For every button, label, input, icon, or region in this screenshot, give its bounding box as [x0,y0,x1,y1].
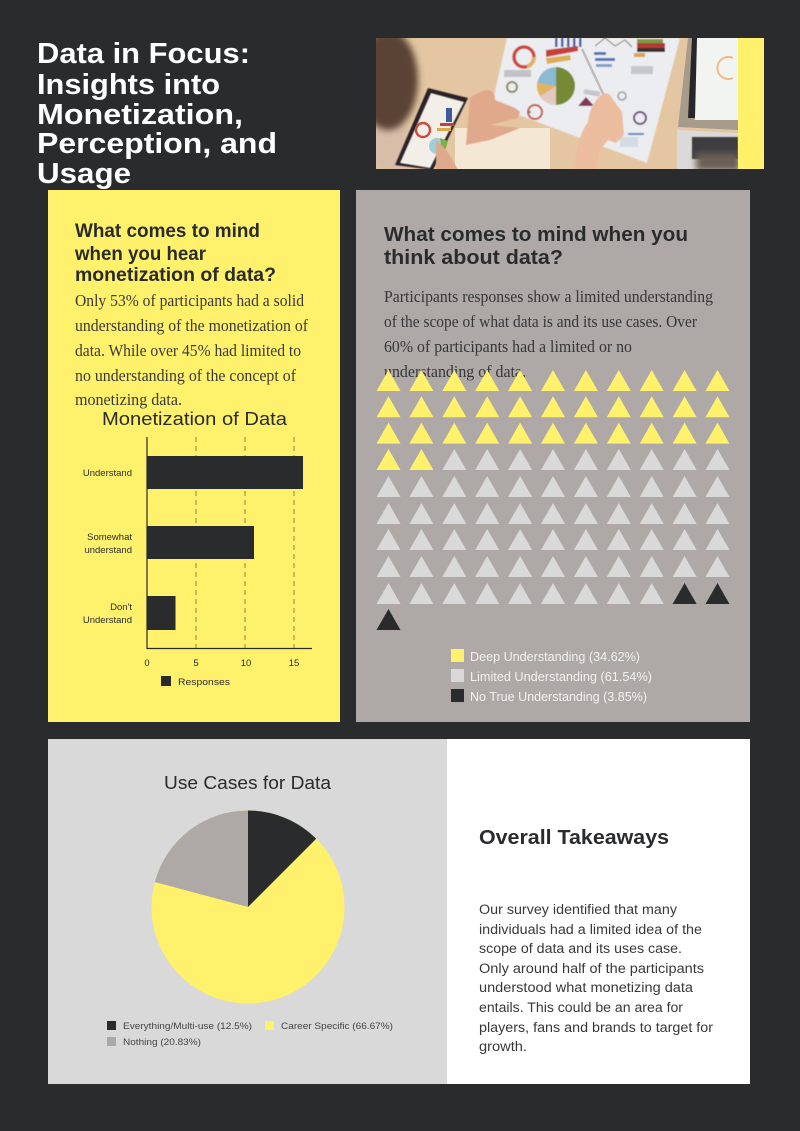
sleeve and arm [376,128,408,169]
bar chart: monetization of data: Somewhat [87,532,132,543]
text: monetization body: Only 53% of participants had a solid [75,291,305,310]
bar chart: monetization of data: Monetization of Data [102,409,288,429]
text: monetization body: data. While over 45% had limited to [75,341,301,360]
title: Usage [37,158,131,190]
bar chart: monetization of data: 10 [241,658,251,669]
heading: takeaways: Overall Takeaways [479,826,669,849]
bar chart: monetization of data: Understand [83,615,132,626]
chart title: Use Cases for Data [164,773,332,793]
accent bar [738,38,764,169]
legend: understanding levels [451,649,652,704]
legend: understanding levels: Limited Understanding (61.54%) [470,670,652,684]
text: perception body: Participants responses show a limited understanding [384,287,713,306]
heading: monetization: What comes to mind [75,220,260,242]
smartphone [395,88,468,170]
text: takeaways body: players, fans and brands to target for [479,1020,714,1035]
text: perception body: understanding of data. [384,362,526,381]
bar chart: monetization of data: Responses [178,677,230,688]
title: Insights into [37,69,220,101]
text: takeaways body: individuals had a limited idea of the [479,922,702,937]
legend: understanding levels: Deep Understanding (34.62%) [470,650,640,664]
heading: monetization: monetization of data? [75,264,276,286]
text: perception body [384,287,713,381]
laptop [678,38,738,130]
bar chart: monetization of data: 0 [144,658,150,669]
pictogram: triangles [376,370,730,630]
report sheet [492,38,680,163]
text: takeaways body: Our survey identified that many [479,902,677,917]
bar chart: monetization of data: 15 [289,658,299,669]
text: perception body: 60% of participants had a limited or no [384,337,632,356]
notebook [455,128,550,170]
heading: perception: What comes to mind when you [384,223,688,246]
text: monetization body: understanding of the monetization of [75,316,308,335]
panel: perception of data [356,190,750,722]
legend: use cases: Everything/Multi-use (12.5%) [123,1021,252,1032]
text: monetization body [75,291,308,409]
title: Monetization, [37,99,243,131]
text: monetization body: no understanding of the concept of [75,366,296,385]
heading: perception [384,223,688,269]
pie chart [152,810,344,1004]
panel: monetization [48,190,340,722]
title [37,38,277,190]
legend: use cases [107,1021,393,1048]
heading: perception: think about data? [384,246,563,269]
text: monetization body: monetizing data. [75,390,182,409]
heading: monetization: when you hear [74,243,206,265]
panel: overall takeaways [447,739,750,1084]
left hand [466,90,520,145]
title: Data in Focus: [37,38,250,70]
text: takeaways body: Only around half of the participants [479,961,704,976]
bar chart: monetization of data: Don't [110,602,132,613]
text: perception body: of the scope of what data is and its use cases. Over [384,312,697,331]
text: takeaways body: growth. [479,1039,527,1054]
right hand [573,93,624,170]
text: takeaways body: understood what monetizing data [479,980,694,995]
text: takeaways body: scope of data and its uses case. [479,941,682,956]
legend: understanding levels: No True Understanding (3.85%) [470,690,647,704]
legend: use cases: Career Specific (66.67%) [281,1021,393,1032]
title: Perception, and [37,128,277,160]
bar chart: monetization of data: 5 [193,658,199,669]
photo: hands holding charts over a desk [376,38,738,169]
heading: monetization [74,220,276,286]
person's hair [376,38,423,135]
bar chart: monetization of data [83,409,312,688]
pen [581,48,604,95]
legend: use cases: Nothing (20.83%) [123,1037,201,1048]
text: takeaways body [479,902,714,1054]
bar chart: monetization of data: Understand [83,468,132,479]
text: takeaways body: entails. This could be an area for [479,1000,684,1015]
panel: use cases [48,739,447,1084]
bar chart: monetization of data: understand [84,545,132,556]
